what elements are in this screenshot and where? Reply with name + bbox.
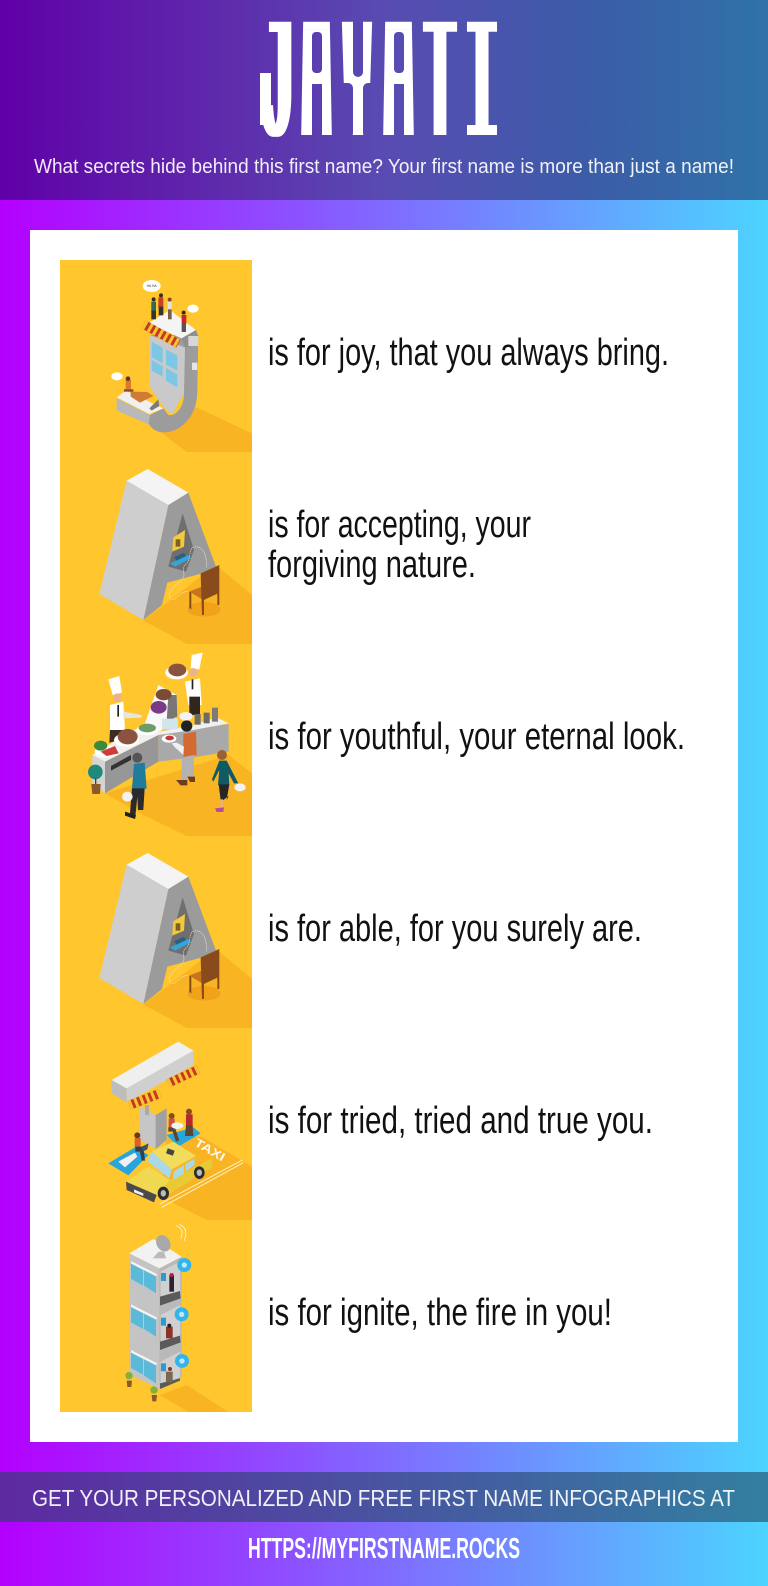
taxi road lettering: TAXI — [192, 1135, 228, 1164]
caption: A able: is for able, for you surely are. — [268, 908, 642, 950]
illustration: buffet with chefs — [88, 653, 252, 836]
figures on the roof: HA HA — [147, 284, 157, 288]
floor 1 — [131, 1261, 181, 1306]
figure at desk — [111, 372, 159, 411]
chef left — [108, 676, 142, 743]
customer in orange — [162, 712, 197, 785]
customer in teal — [122, 753, 147, 819]
people — [134, 1109, 193, 1161]
caption: T: is for tried, tried and true you. — [268, 1100, 653, 1142]
food on counter — [94, 708, 218, 771]
header band — [0, 0, 768, 200]
subtitle: What secrets hide behind this first name? Your first name is more than just a name! — [34, 156, 734, 178]
caption: A accepting: forgiving nature. — [268, 544, 476, 586]
yellow taxi — [126, 1142, 213, 1202]
panel: yellow image column — [60, 260, 252, 1412]
caption: I: is for ignite, the fire in you! — [268, 1292, 612, 1334]
chef right with roast — [165, 653, 203, 715]
caption: A accepting — [268, 504, 531, 586]
illustration: letter J building — [111, 280, 252, 452]
illustration: letter I office tower — [125, 1224, 228, 1412]
illustration: letter A building with chair — [99, 469, 252, 644]
woman — [212, 750, 246, 812]
footer url: HTTPS://MYFIRSTNAME.ROCKS — [248, 1533, 520, 1565]
footer band — [0, 1472, 768, 1522]
panel: white card — [30, 230, 738, 1442]
blue chat bubbles — [175, 1258, 191, 1368]
illustration: letter T with taxi — [108, 1042, 252, 1220]
caption: A accepting: is for accepting, your — [268, 504, 531, 546]
satellite dish — [153, 1224, 186, 1258]
potted plant — [88, 765, 103, 794]
floor 2 — [131, 1304, 181, 1350]
floor 3 — [131, 1350, 180, 1389]
title: JAYATI — [259, 0, 499, 198]
potted plants — [125, 1372, 158, 1401]
illustration: letter A building with chair (repeat) — [99, 853, 252, 1028]
lane lines — [160, 1160, 243, 1207]
figures on the roof — [143, 280, 199, 332]
